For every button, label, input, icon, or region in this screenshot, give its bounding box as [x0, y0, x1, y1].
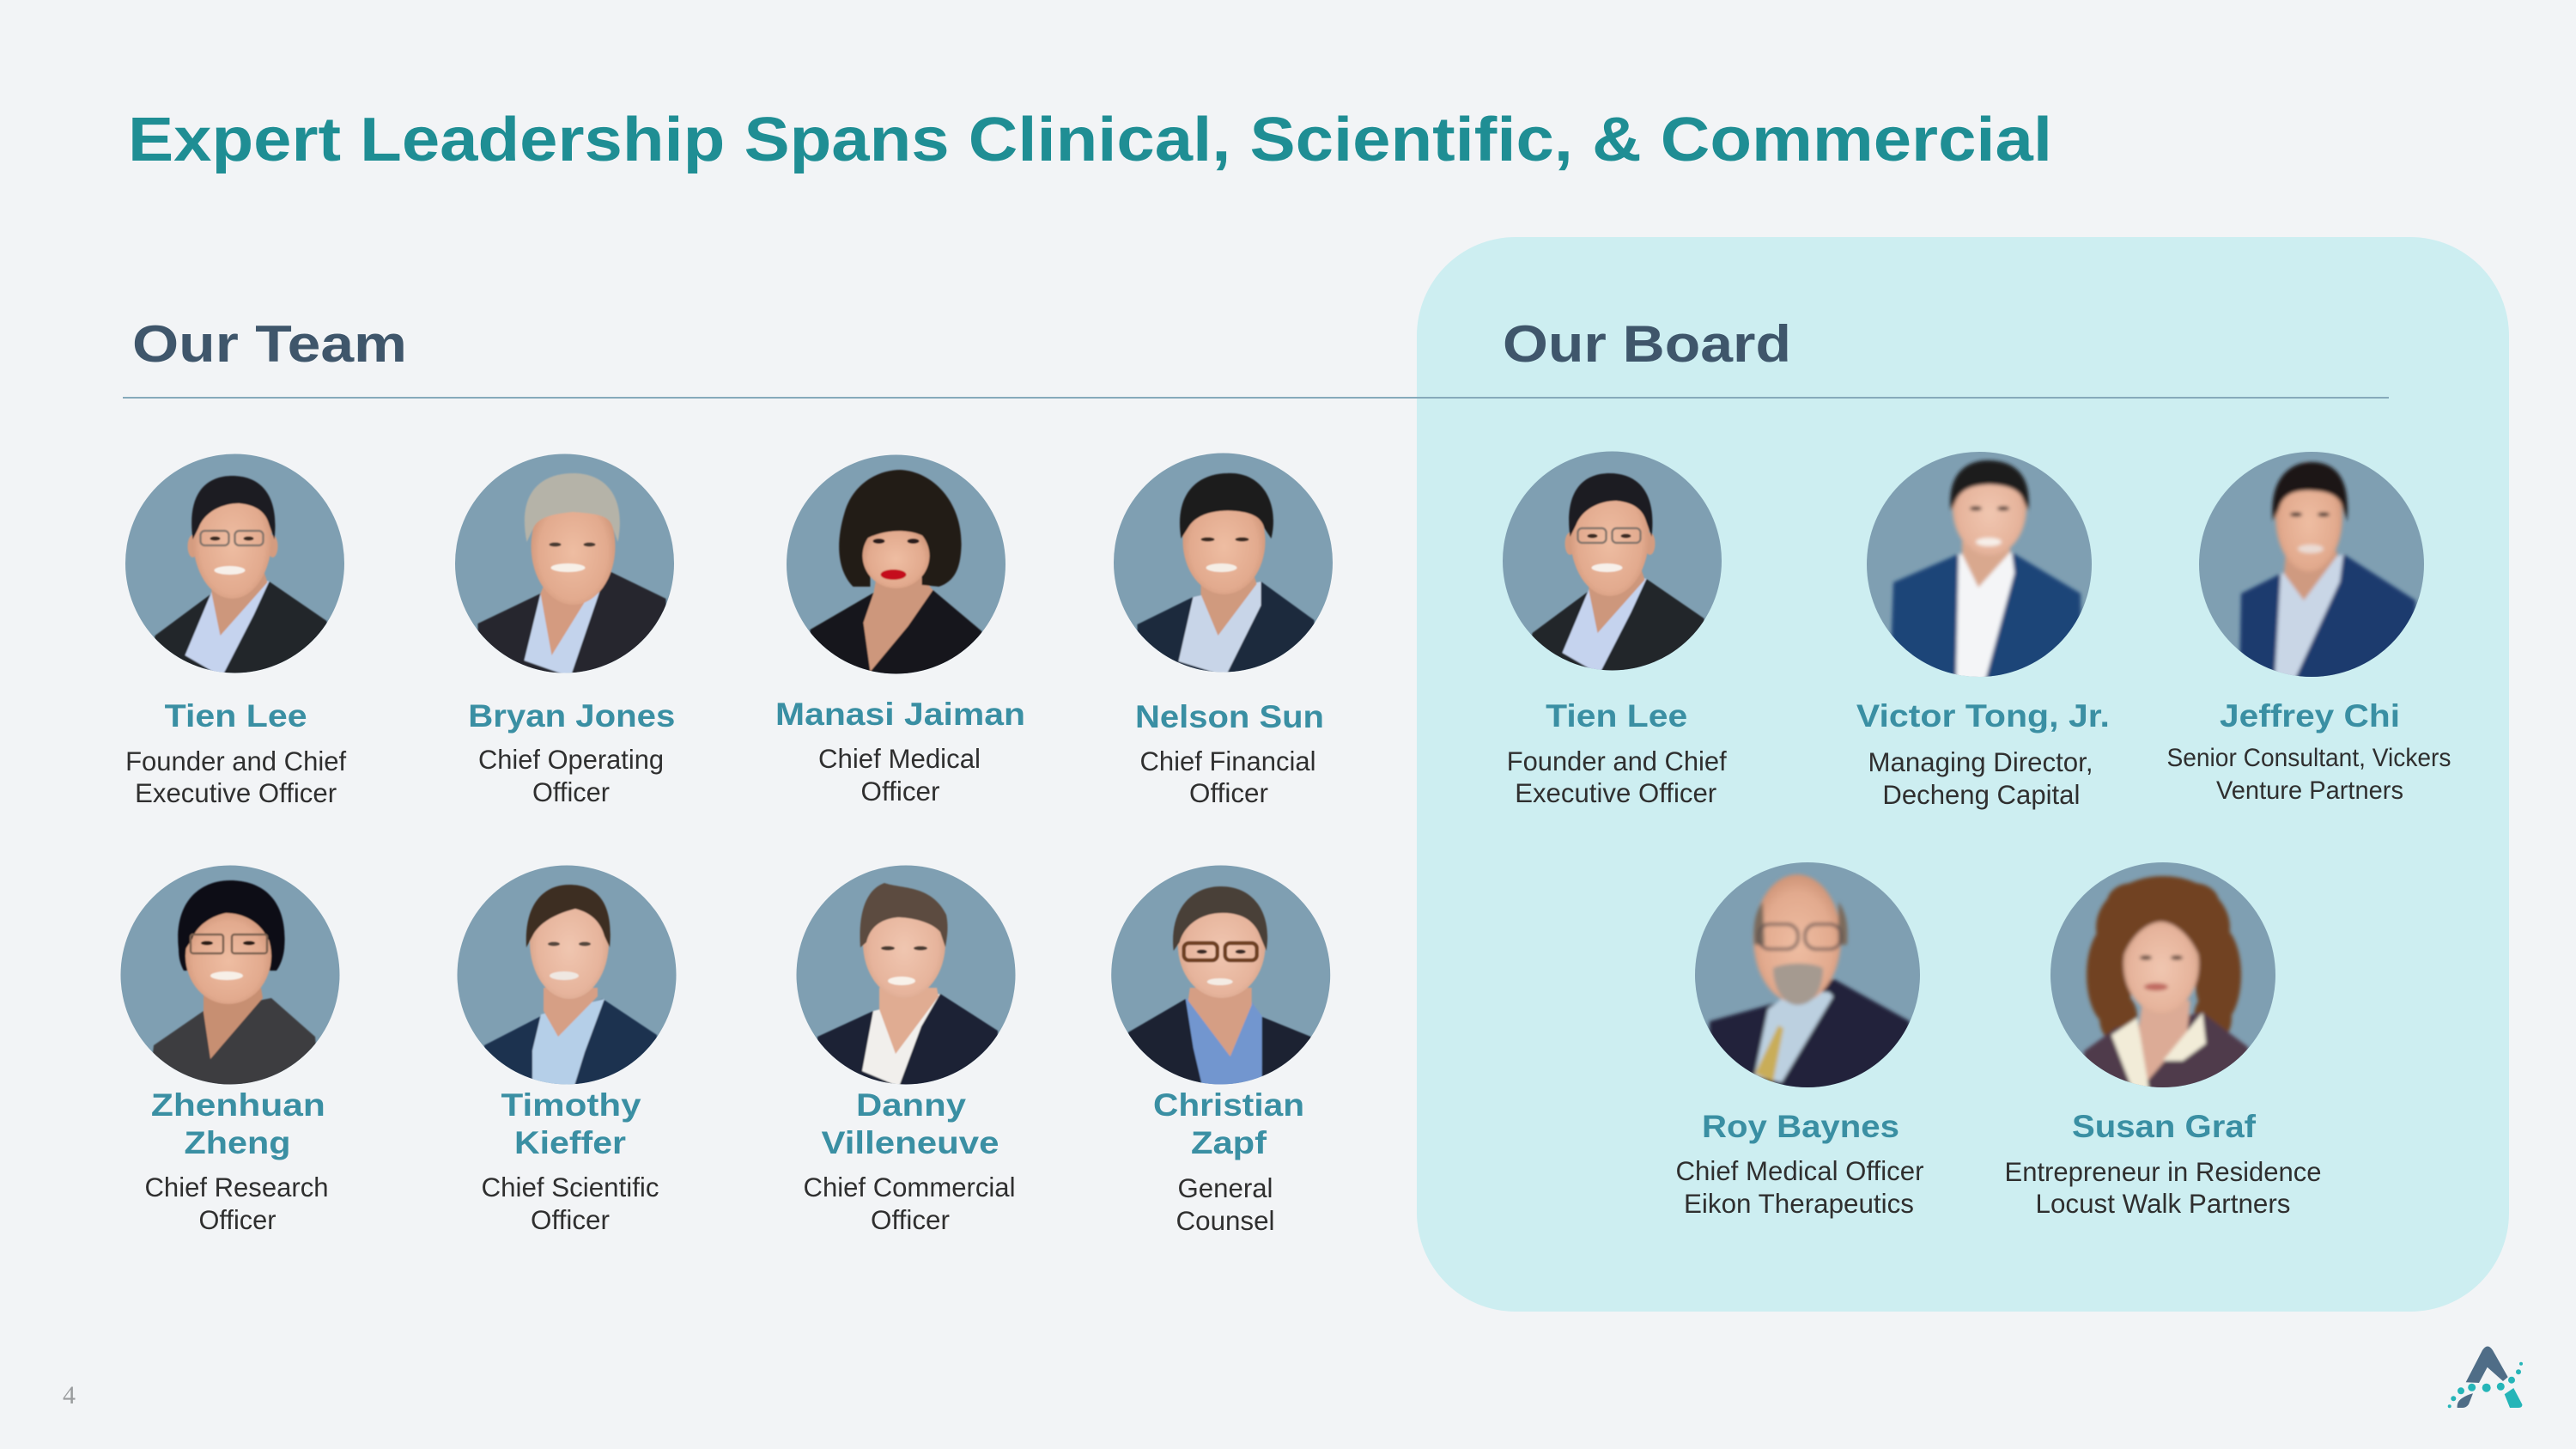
role: Susan Graf: Entrepreneur in Residence: [2004, 1156, 2322, 1187]
name: Christian Zapf: Christian: [1153, 1087, 1304, 1123]
team member: Zhenhuan Zheng: [120, 866, 340, 1235]
team member: Tien Lee: [125, 454, 346, 808]
name: Nelson Sun: Nelson Sun: [1135, 699, 1324, 734]
name: Timothy Kieffer: Kieffer: [514, 1125, 626, 1160]
team member: Timothy Kieffer: [457, 866, 677, 1235]
board member: Tien Lee: [1503, 452, 1727, 808]
role: Roy Baynes: Eikon Therapeutics: [1684, 1188, 1914, 1219]
role: Zhenhuan Zheng: Officer: [199, 1204, 276, 1235]
portrait: Zhenhuan Zheng: [120, 866, 340, 1091]
role: Victor Tong, Jr.: Decheng Capital: [1882, 779, 2080, 810]
role: Timothy Kieffer: Chief Scientific: [481, 1172, 659, 1202]
role: Susan Graf: [2004, 1156, 2322, 1219]
role: Susan Graf: Locust Walk Partners: [2035, 1188, 2291, 1219]
portrait: Manasi Jaiman: [787, 455, 1005, 680]
role: Manasi Jaiman: Officer: [860, 776, 939, 807]
role: Timothy Kieffer: [481, 1172, 659, 1235]
name: Christian Zapf: [1153, 1087, 1304, 1160]
role: Bryan Jones: [478, 744, 664, 807]
portrait: Nelson Sun: [1114, 454, 1333, 676]
role: Tien Lee: Founder and Chief: [1507, 746, 1727, 776]
name: Roy Baynes: Roy Baynes: [1702, 1109, 1899, 1144]
role: Nelson Sun: Officer: [1189, 777, 1268, 808]
role: Roy Baynes: Chief Medical Officer: [1676, 1155, 1923, 1186]
role: Tien Lee: Executive Officer: [1515, 777, 1716, 808]
name: Danny Villeneuve: Villeneuve: [821, 1125, 999, 1160]
role: Tien Lee: Executive Officer: [135, 777, 337, 808]
role: Zhenhuan Zheng: [144, 1172, 328, 1235]
title: Expert Leadership Spans Clinical, Scientific, & Commercial: [128, 106, 2052, 174]
name: Jeffrey Chi: Jeffrey Chi: [2220, 698, 2400, 734]
portrait: Tien Lee: [1503, 452, 1722, 674]
board member: Susan Graf: [2004, 862, 2322, 1219]
role: Christian Zapf: Counsel: [1176, 1205, 1274, 1236]
team member: Danny Villeneuve: [797, 866, 1015, 1235]
heading: our team: Our Team: [132, 315, 407, 373]
portrait: Susan Graf: [2050, 862, 2275, 1091]
role: Bryan Jones: Officer: [532, 776, 610, 807]
role: Victor Tong, Jr.: Managing Director,: [1868, 746, 2093, 777]
role: Danny Villeneuve: Officer: [871, 1204, 950, 1235]
portrait: Christian Zapf: [1111, 866, 1330, 1091]
name: Christian Zapf: Zapf: [1191, 1125, 1267, 1160]
name: Tien Lee: Tien Lee: [1546, 698, 1687, 734]
role: Manasi Jaiman: Chief Medical: [818, 743, 981, 774]
board member: Victor Tong, Jr.: [1856, 452, 2110, 810]
name: Tien Lee: Tien Lee: [165, 698, 307, 734]
role: Zhenhuan Zheng: Chief Research: [144, 1172, 328, 1202]
portrait: Timothy Kieffer: [457, 866, 677, 1091]
role: Christian Zapf: [1176, 1172, 1274, 1236]
team member: Christian Zapf: [1111, 866, 1330, 1236]
name: Bryan Jones: Bryan Jones: [468, 698, 675, 734]
role: Danny Villeneuve: [804, 1172, 1015, 1235]
board member: Jeffrey Chi: [2167, 452, 2451, 805]
team member: Bryan Jones: [455, 454, 675, 807]
portrait: Jeffrey Chi: [2199, 452, 2424, 680]
name: Timothy Kieffer: [501, 1087, 641, 1160]
role: Nelson Sun: [1140, 746, 1315, 808]
portrait: Danny Villeneuve: [797, 866, 1015, 1091]
role: Danny Villeneuve: Chief Commercial: [804, 1172, 1015, 1202]
name: Manasi Jaiman: Manasi Jaiman: [775, 697, 1025, 732]
portrait: Roy Baynes: [1695, 862, 1920, 1091]
role: Bryan Jones: Chief Operating: [478, 744, 664, 775]
name: Zhenhuan Zheng: Zheng: [184, 1125, 290, 1160]
role: Manasi Jaiman: [818, 743, 981, 807]
role: Tien Lee: Founder and Chief: [125, 746, 346, 776]
portrait: Victor Tong, Jr.: [1867, 452, 2092, 680]
name: Zhenhuan Zheng: Zhenhuan: [151, 1087, 325, 1123]
board member: Roy Baynes: [1676, 862, 1923, 1219]
role: Nelson Sun: Chief Financial: [1140, 746, 1315, 776]
role: Jeffrey Chi: Venture Partners: [2216, 776, 2403, 805]
role: Tien Lee: [1507, 746, 1727, 808]
team member: Manasi Jaiman: [775, 455, 1025, 807]
role: Tien Lee: [125, 746, 346, 808]
role: Christian Zapf: General: [1178, 1172, 1273, 1203]
team member: Nelson Sun: [1114, 454, 1333, 808]
name: Danny Villeneuve: Danny: [856, 1087, 966, 1123]
panel: our board background: [1417, 237, 2509, 1312]
page number: 4: [63, 1381, 76, 1409]
role: Timothy Kieffer: Officer: [531, 1204, 610, 1235]
heading: our board: Our Board: [1503, 315, 1791, 373]
icon: company logo: [2448, 1347, 2523, 1408]
portrait: Tien Lee: [125, 454, 344, 677]
role: Victor Tong, Jr.: [1868, 746, 2093, 810]
name: Zhenhuan Zheng: [151, 1087, 325, 1160]
role: Jeffrey Chi: Senior Consultant, Vickers: [2167, 744, 2451, 772]
role: Jeffrey Chi: [2167, 744, 2451, 805]
name: Timothy Kieffer: Timothy: [501, 1087, 641, 1123]
name: Susan Graf: Susan Graf: [2072, 1109, 2257, 1144]
name: Victor Tong, Jr.: Victor Tong, Jr.: [1856, 698, 2110, 734]
portrait: Bryan Jones: [455, 454, 674, 677]
role: Roy Baynes: [1676, 1155, 1923, 1219]
name: Danny Villeneuve: [821, 1087, 999, 1160]
